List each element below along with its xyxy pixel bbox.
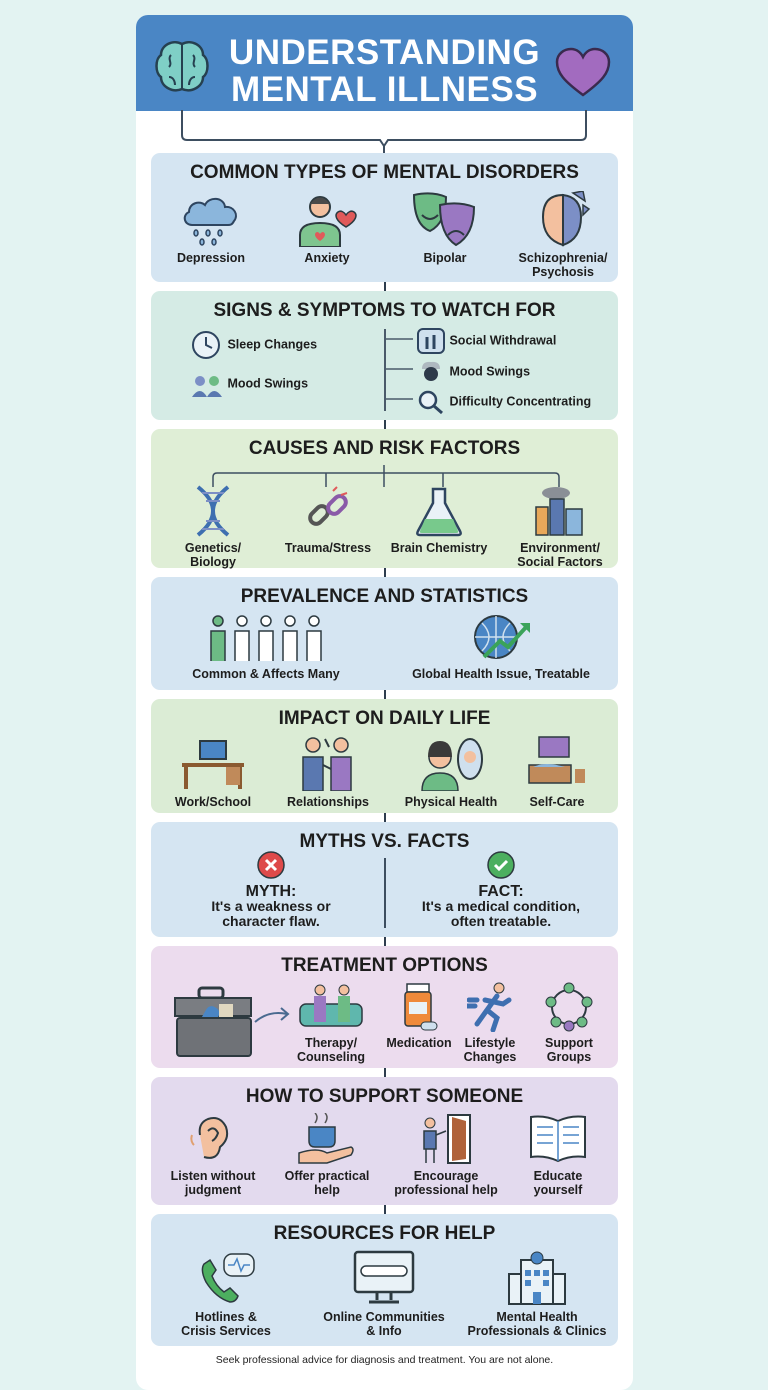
- item: depression: [177, 198, 245, 265]
- fact: FACT:: [478, 883, 524, 900]
- item: schizophrenia: [518, 191, 608, 279]
- panel: prevalence: PREVALENCE AND STATISTICS: [241, 586, 528, 607]
- item: encourage professional help: Encourage: [414, 1169, 478, 1183]
- item: hotlines: Crisis Services: [181, 1324, 271, 1338]
- item: schizophrenia: Psychosis: [532, 265, 594, 279]
- myth: It's a weakness or: [211, 898, 331, 914]
- item: therapy: [297, 984, 365, 1064]
- item: practical help: [285, 1113, 369, 1197]
- myth: MYTH:: [246, 883, 296, 900]
- panel: causes: CAUSES AND RISK FACTORS: [249, 438, 520, 459]
- panel: treatment options: TREATMENT OPTIONS: [281, 955, 488, 976]
- item: self-care: [528, 736, 585, 809]
- item: support groups: Groups: [547, 1050, 591, 1064]
- item: global health issue: [412, 615, 590, 681]
- item: hotlines: Hotlines &: [195, 1310, 257, 1324]
- myth: character flaw.: [222, 913, 320, 929]
- symptom: difficulty concentrating: [418, 390, 591, 414]
- panel: impact on daily life: [151, 699, 618, 813]
- item: lifestyle: [464, 982, 516, 1064]
- item: relationships: Relationships: [287, 795, 369, 809]
- item: environment: Social Factors: [517, 555, 603, 569]
- item: physical health: Physical Health: [405, 795, 497, 809]
- item: educate yourself: Educate: [534, 1169, 582, 1183]
- panel: signs and symptoms: SIGNS & SYMPTOMS TO WATCH FOR: [213, 300, 556, 321]
- item: practical help: help: [314, 1183, 340, 1197]
- item: bipolar: [413, 192, 475, 265]
- item: lifestyle: Changes: [464, 1050, 516, 1064]
- item: professionals: Mental Health: [496, 1310, 578, 1324]
- item: anxiety: Anxiety: [304, 251, 350, 265]
- icon: heart: [556, 48, 610, 96]
- panel: resources for help: RESOURCES FOR HELP: [274, 1223, 495, 1244]
- item: self-care: Self-Care: [530, 795, 584, 809]
- title: [229, 33, 540, 109]
- item: encourage professional help: professional help: [394, 1183, 498, 1197]
- item: professionals: Professionals & Clinics: [468, 1324, 606, 1338]
- item: brain chemistry: [391, 488, 488, 555]
- item: global health issue: Global Health Issue, Treatable: [412, 667, 590, 681]
- item: educate yourself: [530, 1116, 586, 1197]
- symptom: mood swings: Mood Swings: [227, 376, 308, 390]
- connector bracket: [181, 110, 587, 153]
- fact: often treatable.: [451, 913, 551, 929]
- title: UNDERSTANDING: [229, 33, 540, 72]
- item: trauma: [285, 486, 371, 555]
- symptom: sleep changes: Sleep Changes: [227, 337, 317, 351]
- panel: impact on daily life: IMPACT ON DAILY LIFE: [279, 708, 490, 729]
- item: support groups: Support: [545, 1036, 593, 1050]
- panel: signs and symptoms: [151, 291, 618, 420]
- item: common and affects many: [192, 615, 340, 681]
- item: medication: Medication: [386, 1036, 452, 1050]
- panel: common types: [151, 153, 618, 282]
- fact: [422, 851, 580, 929]
- myth: [211, 851, 331, 929]
- item: work/school: Work/School: [175, 795, 251, 809]
- symptom: mood swings 2: Mood Swings: [449, 364, 530, 378]
- item: relationships: [287, 737, 369, 809]
- item: online communities: & Info: [366, 1324, 402, 1338]
- item: environment: [517, 487, 603, 569]
- panel: resources for help: [151, 1214, 618, 1346]
- item: listen: judgment: [185, 1183, 241, 1197]
- item: environment: Environment/: [520, 541, 600, 555]
- item: trauma: Trauma/Stress: [285, 541, 371, 555]
- item: depression: Depression: [177, 251, 245, 265]
- panel: common types: COMMON TYPES OF MENTAL DISORDERS: [190, 162, 579, 183]
- item: physical health: [405, 738, 497, 809]
- item: hotlines: [181, 1253, 271, 1338]
- item: bipolar: Bipolar: [423, 251, 467, 265]
- panel: how to support someone: [151, 1077, 618, 1205]
- symptom: sleep changes: [192, 331, 317, 359]
- panel: myths vs facts: MYTHS VS. FACTS: [300, 831, 469, 852]
- item: work/school: [174, 740, 251, 809]
- fact: It's a medical condition,: [422, 898, 580, 914]
- panel: prevalence: [151, 577, 618, 690]
- arrow: [254, 1007, 290, 1023]
- panel: causes: [151, 429, 618, 568]
- item: genetics: [185, 486, 241, 569]
- item: professionals: [468, 1252, 606, 1338]
- symptom: social withdrawal: [417, 328, 556, 354]
- item: genetics: Biology: [190, 555, 236, 569]
- header: [136, 15, 633, 111]
- item: anxiety: [299, 196, 357, 265]
- panel: how to support someone: HOW TO SUPPORT SOMEONE: [246, 1086, 523, 1107]
- panel: treatment options: [151, 946, 618, 1068]
- panel: myths vs facts: [151, 822, 618, 937]
- symptom: mood swings 2: [422, 362, 530, 381]
- symptom: difficulty concentrating: Difficulty Concentrating: [449, 394, 591, 408]
- item: encourage professional help: [394, 1114, 498, 1197]
- item: therapy: Counseling: [297, 1050, 365, 1064]
- item: educate yourself: yourself: [534, 1183, 582, 1197]
- item: listen: [171, 1117, 256, 1197]
- footer note: Seek professional advice for diagnosis and treatment. You are not alone.: [216, 1354, 553, 1366]
- item: genetics: Genetics/: [185, 541, 241, 555]
- item: online communities: Online Communities: [323, 1310, 445, 1324]
- item: therapy: Therapy/: [305, 1036, 357, 1050]
- item: medication: [386, 983, 452, 1050]
- symptom: social withdrawal: Social Withdrawal: [449, 333, 556, 347]
- symptom: mood swings: [192, 376, 308, 397]
- icon: toolbox: [174, 986, 252, 1057]
- item: practical help: Offer practical: [285, 1169, 369, 1183]
- icon: brain: [155, 41, 209, 92]
- item: lifestyle: Lifestyle: [465, 1036, 515, 1050]
- item: common and affects many: Common & Affects Many: [192, 667, 340, 681]
- item: brain chemistry: Brain Chemistry: [391, 541, 487, 555]
- title: MENTAL ILLNESS: [231, 70, 538, 109]
- item: schizophrenia: Schizophrenia/: [519, 251, 607, 265]
- item: support groups: [545, 982, 593, 1064]
- item: listen: Listen without: [171, 1169, 255, 1183]
- item: online communities: [323, 1250, 445, 1338]
